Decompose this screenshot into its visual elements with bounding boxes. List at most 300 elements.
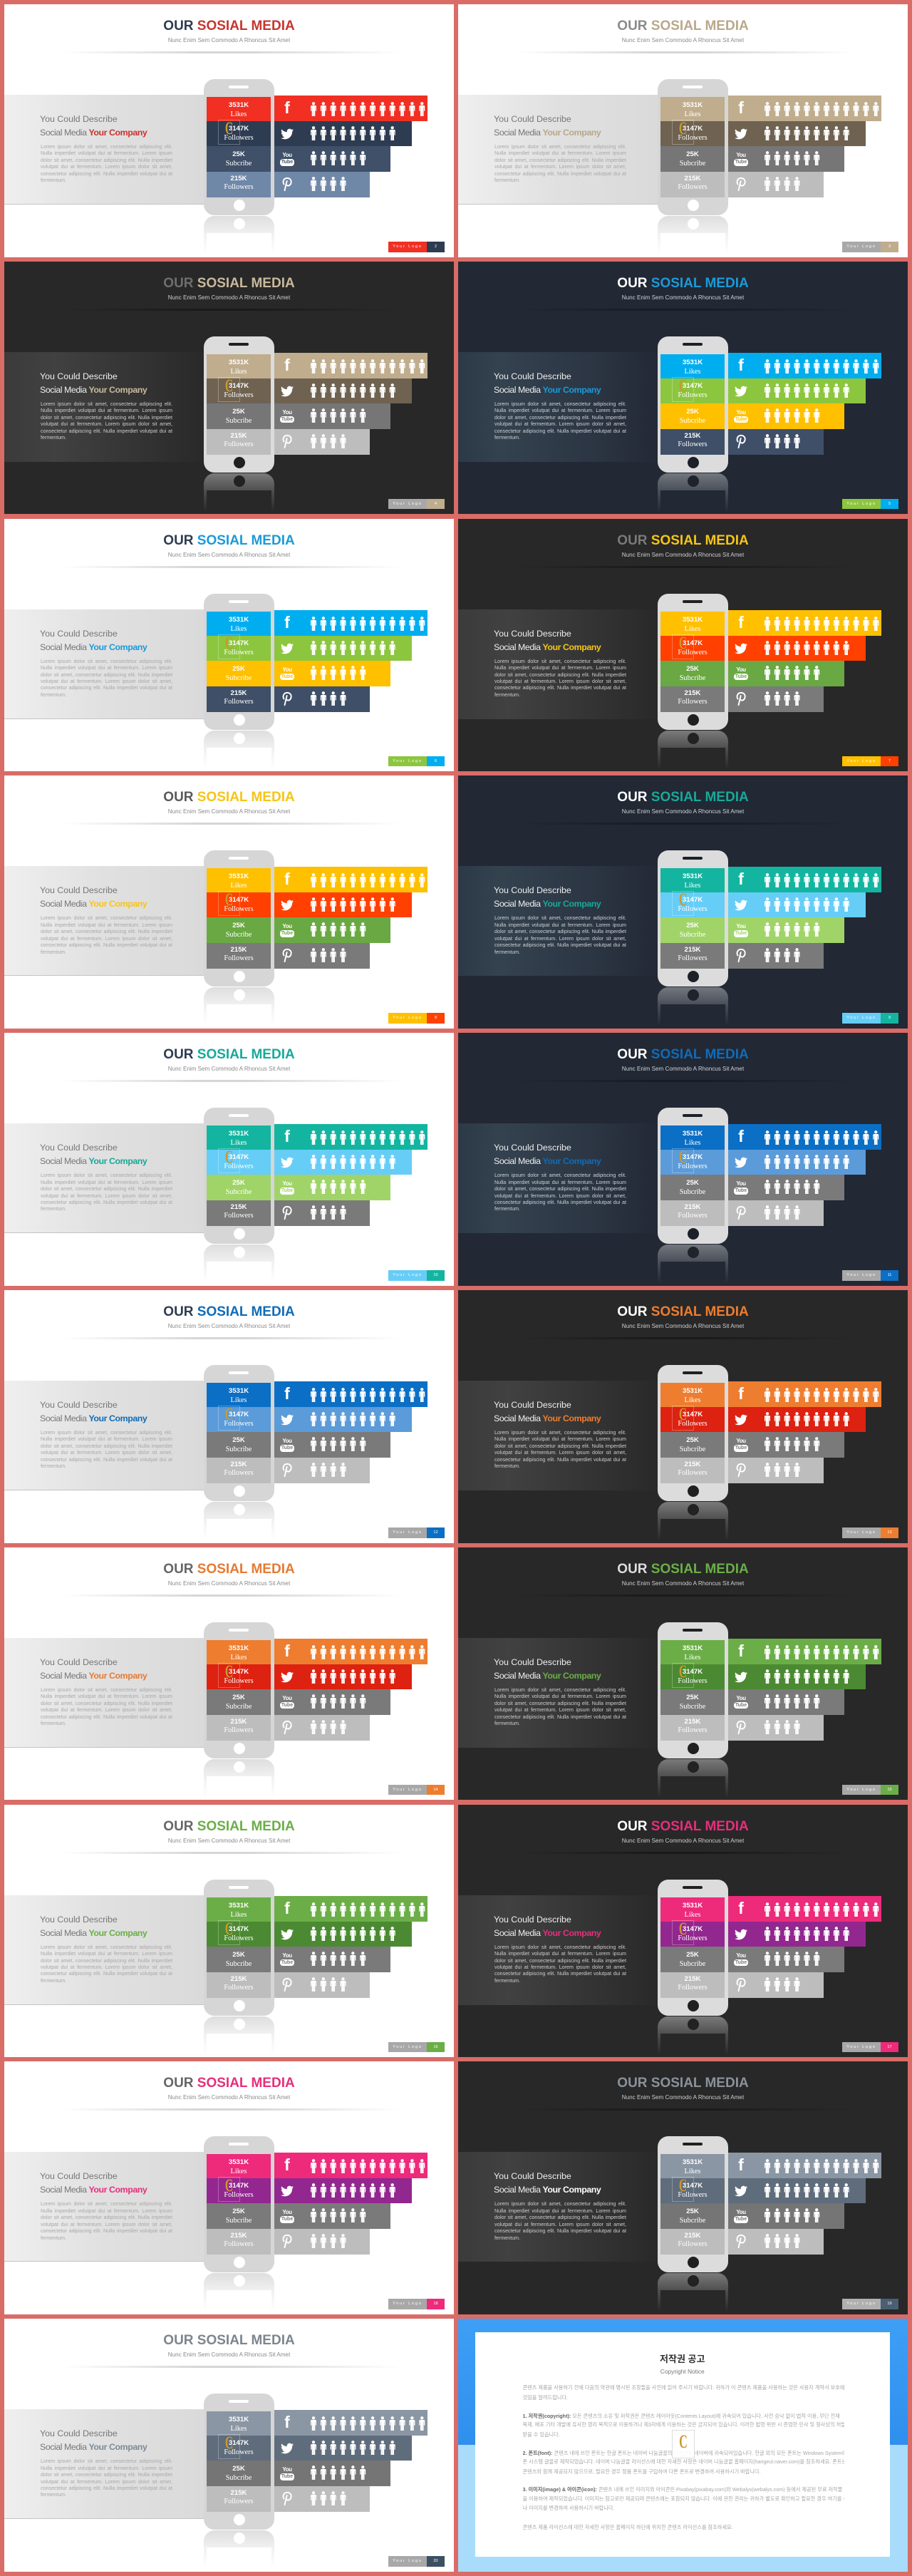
- description text: [494, 1654, 629, 1733]
- row: youtube: Tube: [735, 2217, 747, 2222]
- row: pinterest: [207, 1972, 428, 1998]
- watermark: [672, 634, 694, 659]
- row: twitter: 3147K: [683, 1668, 703, 1676]
- description text: Lorem ipsum dolor sit amet, consectetur adipiscing elit. Nulla imperdiet volutpat dui at fermentum. Lorem ipsum dolor sit amet, consectetur adipiscing elit. Nulla imperdiet volutpat dui at fermentum. Lorem ipsum dolor sit amet, consectetur adipiscing elit. Nulla imperdiet volutpat dui at fermentum.: [41, 144, 172, 183]
- row: twitter: [207, 892, 428, 917]
- row: pinterest: [207, 429, 370, 455]
- row: twitter: [207, 121, 412, 146]
- row: youtube: 25K: [232, 665, 245, 673]
- slide: copyright notice: [458, 2319, 908, 2572]
- row: youtube: You: [736, 1180, 746, 1187]
- row: pinterest: [207, 172, 370, 197]
- row: twitter: 3147K: [683, 639, 703, 647]
- slide: red theme, light: [4, 4, 454, 257]
- title: OUR SOSIAL MEDIA: [617, 1047, 749, 1062]
- row: youtube: Subcribe: [680, 417, 705, 425]
- section 2 line 3: 콘텐츠와 함께 제공되지 않으므로, 필요한 경우 정품 폰트를 구입하여 다른 폰트로 변경하여 사용하시기 바랍니다.: [523, 2468, 761, 2475]
- description text: Social Media Your Company: [494, 642, 601, 652]
- row: twitter: Followers: [678, 1934, 708, 1942]
- row: pinterest: [207, 2486, 428, 2512]
- row: youtube: You: [736, 409, 746, 416]
- row: youtube: [660, 2203, 881, 2229]
- logo bar: Your Logo: [846, 502, 876, 506]
- row: twitter: [207, 2436, 428, 2461]
- row: facebook: Likes: [231, 1396, 247, 1404]
- logo bar: 15: [887, 1788, 892, 1792]
- left band: [458, 1638, 659, 1748]
- row: twitter: 3147K: [683, 1925, 703, 1933]
- description text: You Could Describe: [494, 371, 571, 381]
- row: facebook: f: [738, 2155, 744, 2174]
- slide: orange theme, light: [4, 1547, 454, 1800]
- row: twitter: 3147K: [683, 1411, 703, 1418]
- row: youtube: [207, 146, 390, 172]
- row: twitter: 3147K: [229, 1153, 249, 1161]
- title: OUR SOSIAL MEDIA: [163, 1304, 295, 1319]
- phone: [658, 336, 728, 473]
- logo bar: [842, 499, 898, 509]
- title: OUR SOSIAL MEDIA: [163, 1819, 295, 1834]
- description text: [494, 371, 626, 441]
- description text: Lorem ipsum dolor sit amet, consectetur adipiscing elit. Nulla imperdiet volutpat dui at fermentum. Lorem ipsum dolor sit amet, consectetur adipiscing elit. Nulla imperdiet volutpat dui at fermentum. Lorem ipsum dolor sit amet, consectetur adipiscing elit. Nulla imperdiet volutpat dui at fermentum.: [494, 1944, 626, 1984]
- phone: [658, 79, 728, 215]
- row: youtube: [207, 403, 390, 429]
- row: youtube: Subcribe: [680, 160, 705, 168]
- row: facebook: [660, 867, 881, 892]
- phone: [658, 594, 728, 730]
- phone reflection: [204, 1502, 274, 1543]
- row: twitter: [660, 121, 866, 146]
- row: twitter: 3147K: [229, 2439, 249, 2447]
- row: twitter: 3147K: [683, 2182, 703, 2190]
- description text: Social Media Your Company: [494, 899, 601, 909]
- row: youtube: [660, 146, 844, 172]
- description text: Lorem ipsum dolor sit amet, consectetur adipiscing elit. Nulla imperdiet volutpat dui at fermentum. Lorem ipsum dolor sit amet, consectetur adipiscing elit. Nulla imperdiet volutpat dui at fermentum. Lorem ipsum dolor sit amet, consectetur adipiscing elit. Nulla imperdiet volutpat dui at fermentum.: [494, 2201, 626, 2241]
- watermark: C: [225, 1148, 233, 1167]
- phone: [204, 1365, 274, 1501]
- row: facebook: f: [738, 1899, 744, 1917]
- logo bar: [388, 1527, 445, 1538]
- row: twitter: Followers: [224, 134, 254, 142]
- row: pinterest: 215K: [231, 1460, 247, 1468]
- title: OUR SOSIAL MEDIA: [617, 1562, 749, 1577]
- section 1 line 2: 복제, 배포 기타 개발에 유사한 영리 목적으로 이용하거나 제3자에게 이용하는 것은 금지되어 있습니다. 이러한 법령 위반 시 준엄한 민사 및 형사상의 처벌을: [523, 2421, 844, 2428]
- logo bar: 11: [888, 1273, 891, 1277]
- left band: [4, 1123, 205, 1233]
- description text: Lorem ipsum dolor sit amet, consectetur adipiscing elit. Nulla imperdiet volutpat dui at fermentum. Lorem ipsum dolor sit amet, consectetur adipiscing elit. Nulla imperdiet volutpat dui at fermentum. Lorem ipsum dolor sit amet, consectetur adipiscing elit. Nulla imperdiet volutpat dui at fermentum.: [494, 1687, 626, 1726]
- row: pinterest: 215K: [231, 1203, 247, 1211]
- phone: [204, 1622, 274, 1758]
- row: facebook: Likes: [231, 1139, 247, 1147]
- row: facebook: [660, 96, 881, 121]
- subtitle: Nunc Enim Sem Commodo A Rhoncus Sit Amet: [622, 552, 744, 558]
- row: facebook: [207, 2153, 428, 2178]
- description text: Lorem ipsum dolor sit amet, consectetur adipiscing elit. Nulla imperdiet volutpat dui at fermentum. Lorem ipsum dolor sit amet, consectetur adipiscing elit. Nulla imperdiet volutpat dui at fermentum. Lorem ipsum dolor sit amet, consectetur adipiscing elit. Nulla imperdiet volutpat dui at fermentum.: [41, 1173, 172, 1212]
- row: pinterest: Followers: [678, 1212, 708, 1220]
- row: youtube: You: [282, 1952, 292, 1959]
- slide: teal theme, navy: [458, 776, 908, 1029]
- slide: blue theme, light: [4, 1290, 454, 1543]
- description text: Social Media Your Company: [40, 2185, 147, 2195]
- row: facebook: f: [284, 1127, 290, 1145]
- row: facebook: f: [284, 2413, 290, 2431]
- slide: teal theme, light: [4, 1033, 454, 1286]
- logo bar: Your Logo: [393, 2045, 423, 2049]
- subtitle: Nunc Enim Sem Commodo A Rhoncus Sit Amet: [622, 294, 744, 301]
- description text: [40, 882, 175, 961]
- row: twitter: [660, 1922, 881, 1947]
- intro text end: 것임을 알려드립니다.: [523, 2394, 568, 2401]
- row: youtube: 25K: [232, 1694, 245, 1701]
- watermark: C: [679, 1405, 687, 1424]
- row: youtube: Subcribe: [680, 2217, 705, 2225]
- title: OUR SOSIAL MEDIA: [163, 2076, 295, 2091]
- row: youtube: [207, 1689, 428, 1715]
- row: facebook: 3531K: [229, 2416, 249, 2423]
- description text: [494, 629, 626, 698]
- watermark: [218, 120, 240, 145]
- phone: [658, 1108, 728, 1244]
- row: facebook: Likes: [231, 1911, 247, 1919]
- description text: You Could Describe: [40, 1657, 118, 1667]
- logo bar: Your Logo: [846, 1273, 876, 1277]
- logo bar: [842, 2042, 898, 2052]
- row: youtube: 25K: [686, 1694, 699, 1701]
- description text: You Could Describe: [494, 1143, 571, 1153]
- logo bar: 19: [887, 2302, 892, 2306]
- row: youtube: You: [282, 923, 292, 929]
- row: facebook: 3531K: [229, 1902, 249, 1910]
- watermark: [672, 1663, 694, 1688]
- description text: Social Media Your Company: [494, 1928, 601, 1938]
- row: twitter: 3147K: [229, 1668, 249, 1676]
- row: pinterest: [660, 1200, 881, 1226]
- description text: Social Media Your Company: [40, 1671, 147, 1681]
- slide: gray theme, dark: [458, 2061, 908, 2314]
- description text: [40, 371, 172, 441]
- slide: green theme, light: [4, 1805, 454, 2057]
- phone: [658, 1880, 728, 2016]
- description text: Social Media Your Company: [494, 1671, 601, 1681]
- row: facebook: Likes: [231, 1654, 247, 1661]
- subtitle: Nunc Enim Sem Commodo A Rhoncus Sit Amet: [622, 37, 744, 43]
- phone reflection: [204, 731, 274, 772]
- row: youtube: [207, 1947, 428, 1972]
- slide: sky blue theme, navy: [458, 262, 908, 514]
- description text: You Could Describe: [494, 885, 571, 895]
- row: youtube: Tube: [281, 2474, 293, 2479]
- row: pinterest: Followers: [678, 441, 708, 448]
- row: pinterest: 215K: [685, 1203, 700, 1211]
- row: youtube: 25K: [232, 1179, 245, 1187]
- row: pinterest: Followers: [224, 2240, 254, 2248]
- title: OUR SOSIAL MEDIA: [617, 2076, 749, 2091]
- watermark: [672, 120, 694, 145]
- row: youtube: You: [282, 666, 292, 673]
- phone: [204, 2136, 274, 2272]
- watermark: C: [225, 2176, 233, 2195]
- logo bar: [842, 242, 898, 252]
- description text: You Could Describe: [494, 1915, 571, 1925]
- description text: [40, 2168, 175, 2247]
- row: youtube: Tube: [281, 2217, 293, 2222]
- row: pinterest: Followers: [678, 1469, 708, 1477]
- row: twitter: Followers: [224, 2448, 254, 2456]
- row: facebook: Likes: [231, 2425, 247, 2433]
- row: youtube: Subcribe: [226, 160, 252, 168]
- description text: [40, 1397, 175, 1475]
- description text: Social Media Your Company: [494, 128, 601, 138]
- phone: [658, 1365, 728, 1501]
- row: youtube: Tube: [735, 931, 747, 936]
- row: twitter: 3147K: [683, 896, 703, 904]
- logo bar: [842, 756, 898, 766]
- row: youtube: [660, 1432, 881, 1458]
- watermark: [218, 891, 240, 916]
- description text: Lorem ipsum dolor sit amet, consectetur adipiscing elit. Nulla imperdiet volutpat dui at fermentum. Lorem ipsum dolor sit amet, consectetur adipiscing elit. Nulla imperdiet volutpat dui at fermentum. Lorem ipsum dolor sit amet, consectetur adipiscing elit. Nulla imperdiet volutpat dui at fermentum.: [494, 659, 626, 698]
- row: facebook: [207, 96, 428, 121]
- phone reflection: [204, 1245, 274, 1286]
- row: twitter: [207, 1664, 428, 1689]
- description text: Lorem ipsum dolor sit amet, consectetur adipiscing elit. Nulla imperdiet volutpat dui at fermentum. Lorem ipsum dolor sit amet, consectetur adipiscing elit. Nulla imperdiet volutpat dui at fermentum. Lorem ipsum dolor sit amet, consectetur adipiscing elit. Nulla imperdiet volutpat dui at fermentum.: [41, 2201, 172, 2241]
- phone reflection: [204, 1759, 274, 1800]
- row: twitter: [207, 1922, 428, 1947]
- title: OUR SOSIAL MEDIA: [163, 2333, 295, 2348]
- row: pinterest: [207, 2229, 428, 2255]
- logo bar: Your Logo: [846, 1016, 876, 1020]
- row: twitter: Followers: [224, 1420, 254, 1428]
- row: youtube: 25K: [232, 2465, 245, 2473]
- phone reflection: [658, 1502, 728, 1543]
- watermark: [218, 2177, 240, 2202]
- row: facebook: f: [284, 613, 290, 632]
- phone reflection: [658, 1245, 728, 1286]
- description text: [40, 114, 172, 183]
- logo bar: 3: [888, 244, 891, 249]
- description text: Lorem ipsum dolor sit amet, consectetur adipiscing elit. Nulla imperdiet volutpat dui at fermentum. Lorem ipsum dolor sit amet, consectetur adipiscing elit. Nulla imperdiet volutpat dui at fermentum. Lorem ipsum dolor sit amet, consectetur adipiscing elit. Nulla imperdiet volutpat dui at fermentum.: [494, 144, 626, 183]
- phone reflection: [658, 2016, 728, 2058]
- row: twitter: Followers: [678, 1677, 708, 1685]
- phone reflection: [204, 2273, 274, 2314]
- row: youtube: You: [736, 1952, 746, 1959]
- row: pinterest: [660, 1458, 881, 1483]
- description text: Social Media Your Company: [40, 1156, 147, 1166]
- row: youtube: [660, 1689, 881, 1715]
- description text: Lorem ipsum dolor sit amet, consectetur adipiscing elit. Nulla imperdiet volutpat dui at fermentum. Lorem ipsum dolor sit amet, consectetur adipiscing elit. Nulla imperdiet volutpat dui at fermentum. Lorem ipsum dolor sit amet, consectetur adipiscing elit. Nulla imperdiet volutpat dui at fermentum.: [494, 401, 626, 441]
- watermark: C: [225, 1405, 233, 1424]
- watermark: [218, 1663, 240, 1688]
- left band: [4, 1381, 205, 1490]
- row: twitter: 3147K: [229, 2182, 249, 2190]
- watermark: C: [679, 1148, 687, 1167]
- row: twitter: [660, 1664, 881, 1689]
- logo bar: 16: [433, 2045, 438, 2049]
- row: pinterest: [660, 2229, 881, 2255]
- phone reflection: [204, 216, 274, 257]
- row: facebook: 3531K: [229, 1130, 249, 1138]
- description text: You Could Describe: [40, 1400, 118, 1410]
- row: youtube: 25K: [232, 922, 245, 929]
- row: youtube: Subcribe: [226, 2217, 252, 2225]
- logo bar: 14: [433, 1788, 438, 1792]
- description text: Lorem ipsum dolor sit amet, consectetur adipiscing elit. Nulla imperdiet volutpat dui at fermentum. Lorem ipsum dolor sit amet, consectetur adipiscing elit. Nulla imperdiet volutpat dui at fermentum. Lorem ipsum dolor sit amet, consectetur adipiscing elit. Nulla imperdiet volutpat dui at fermentum.: [41, 915, 172, 955]
- row: twitter: [660, 378, 866, 403]
- row: twitter: 3147K: [683, 1153, 703, 1161]
- row: youtube: Subcribe: [226, 674, 252, 682]
- row: facebook: [660, 2153, 881, 2178]
- row: pinterest: Followers: [678, 698, 708, 706]
- row: youtube: [207, 2203, 428, 2229]
- row: facebook: f: [738, 1384, 744, 1403]
- title: OUR SOSIAL MEDIA: [163, 1047, 295, 1062]
- row: facebook: [207, 1381, 428, 1407]
- logo bar: Your Logo: [393, 1788, 423, 1792]
- row: facebook: Likes: [685, 1139, 700, 1147]
- row: facebook: Likes: [231, 882, 247, 890]
- row: twitter: [207, 636, 412, 661]
- slide: blue theme, navy: [458, 1033, 908, 1286]
- watermark: C: [225, 119, 233, 138]
- section 2 line 2: 폰 시스템 글꼴로 제작되었습니다. 네이버 나눔글꼴 라이선스에 대한 자세한 사항은 네이버 나눔글꼴 홈페이지(hangeul.naver.com)를 참조하세요. 폰트는: [523, 2458, 844, 2465]
- watermark: [218, 1920, 240, 1945]
- row: youtube: [207, 1432, 428, 1458]
- watermark: [218, 377, 240, 402]
- logo bar: [388, 242, 445, 252]
- row: twitter: Followers: [224, 1163, 254, 1170]
- left band: [458, 1895, 659, 2005]
- description text: [494, 2168, 629, 2247]
- notice subheading: Copyright Notice: [660, 2368, 705, 2375]
- watermark: [671, 2430, 694, 2458]
- watermark: [672, 377, 694, 402]
- subtitle: Nunc Enim Sem Commodo A Rhoncus Sit Amet: [622, 1066, 744, 1072]
- description text: Lorem ipsum dolor sit amet, consectetur adipiscing elit. Nulla imperdiet volutpat dui at fermentum. Lorem ipsum dolor sit amet, consectetur adipiscing elit. Nulla imperdiet volutpat dui at fermentum. Lorem ipsum dolor sit amet, consectetur adipiscing elit. Nulla imperdiet volutpat dui at fermentum.: [41, 1944, 172, 1984]
- row: pinterest: [660, 943, 881, 969]
- row: facebook: 3531K: [683, 359, 703, 366]
- title: OUR SOSIAL MEDIA: [163, 1562, 295, 1577]
- subtitle: Nunc Enim Sem Commodo A Rhoncus Sit Amet: [168, 1066, 290, 1072]
- title: OUR SOSIAL MEDIA: [163, 790, 295, 805]
- logo bar: 6: [435, 759, 437, 763]
- row: facebook: [660, 1896, 881, 1922]
- row: facebook: f: [738, 356, 744, 374]
- row: pinterest: [660, 1715, 881, 1741]
- row: youtube: You: [282, 2209, 292, 2215]
- row: facebook: Likes: [685, 368, 700, 376]
- row: youtube: You: [282, 152, 292, 158]
- row: youtube: 25K: [232, 1951, 245, 1959]
- description text: Social Media Your Company: [40, 2442, 147, 2452]
- description text: You Could Describe: [40, 114, 118, 124]
- row: youtube: [660, 1175, 881, 1200]
- logo bar: Your Logo: [393, 1530, 423, 1535]
- row: facebook: 3531K: [229, 1644, 249, 1652]
- row: youtube: [660, 403, 844, 429]
- row: facebook: f: [738, 613, 744, 632]
- phone reflection: [658, 2273, 728, 2314]
- description text: You Could Describe: [494, 629, 571, 639]
- row: youtube: Subcribe: [680, 674, 705, 682]
- row: facebook: f: [284, 356, 290, 374]
- row: facebook: 3531K: [683, 1130, 703, 1138]
- logo bar: 10: [433, 1273, 438, 1277]
- subtitle: Nunc Enim Sem Commodo A Rhoncus Sit Amet: [622, 808, 744, 815]
- phone: [658, 850, 728, 986]
- phone reflection: [204, 2530, 274, 2572]
- row: youtube: Tube: [281, 1960, 293, 1965]
- logo bar: Your Logo: [846, 1530, 876, 1535]
- logo bar: 18: [433, 2302, 438, 2306]
- left band: [4, 95, 205, 205]
- row: pinterest: 215K: [685, 2232, 700, 2240]
- left band: [4, 866, 205, 976]
- watermark: C: [679, 376, 687, 396]
- logo bar: [842, 1527, 898, 1538]
- row: facebook: f: [738, 870, 744, 888]
- row: pinterest: 215K: [685, 432, 700, 440]
- logo bar: 5: [888, 502, 891, 506]
- description text: [40, 1140, 175, 1218]
- row: twitter: Followers: [224, 391, 254, 399]
- slide: tan theme, light: [458, 4, 908, 257]
- phone: [204, 1108, 274, 1244]
- row: youtube: 25K: [232, 2207, 245, 2215]
- row: facebook: f: [284, 1384, 290, 1403]
- phone reflection: [204, 987, 274, 1029]
- row: pinterest: Followers: [678, 1726, 708, 1734]
- description text: You Could Describe: [40, 2428, 118, 2438]
- row: pinterest: Followers: [224, 1212, 254, 1220]
- left band: [4, 609, 205, 719]
- row: youtube: You: [282, 409, 292, 416]
- row: youtube: Tube: [281, 1446, 293, 1451]
- row: youtube: Subcribe: [226, 1960, 252, 1968]
- row: youtube: Tube: [281, 160, 293, 165]
- description text: [40, 1912, 175, 1990]
- notice heading: 저작권 공고: [660, 2354, 705, 2364]
- left band: [4, 1895, 205, 2005]
- watermark: [672, 1406, 694, 1431]
- description text: Lorem ipsum dolor sit amet, consectetur adipiscing elit. Nulla imperdiet volutpat dui at fermentum. Lorem ipsum dolor sit amet, consectetur adipiscing elit. Nulla imperdiet volutpat dui at fermentum. Lorem ipsum dolor sit amet, consectetur adipiscing elit. Nulla imperdiet volutpat dui at fermentum.: [494, 1173, 626, 1212]
- description text: Social Media Your Company: [40, 1413, 147, 1423]
- watermark: [218, 2434, 240, 2459]
- logo bar: 7: [888, 759, 891, 763]
- row: facebook: f: [284, 1642, 290, 1660]
- row: youtube: You: [736, 923, 746, 929]
- slide: yellow theme, light: [4, 776, 454, 1029]
- logo bar: [388, 2042, 445, 2052]
- subtitle: Nunc Enim Sem Commodo A Rhoncus Sit Amet: [168, 2094, 290, 2101]
- description text: [494, 1397, 629, 1475]
- left band: [4, 1638, 205, 1748]
- row: twitter: Followers: [678, 905, 708, 913]
- subtitle: Nunc Enim Sem Commodo A Rhoncus Sit Amet: [168, 1838, 290, 1844]
- left band: [458, 1123, 659, 1233]
- row: pinterest: 215K: [685, 946, 700, 954]
- row: pinterest: 215K: [231, 175, 247, 182]
- row: pinterest: 215K: [231, 689, 247, 697]
- description text: You Could Describe: [494, 114, 571, 124]
- row: pinterest: Followers: [224, 2498, 254, 2505]
- watermark: C: [679, 119, 687, 138]
- row: youtube: Subcribe: [226, 1703, 252, 1711]
- logo bar: Your Logo: [393, 1273, 423, 1277]
- description text: You Could Describe: [40, 1915, 118, 1925]
- row: youtube: 25K: [686, 1951, 699, 1959]
- row: pinterest: 215K: [231, 1718, 247, 1726]
- row: pinterest: 215K: [685, 689, 700, 697]
- notice card: [475, 2332, 890, 2557]
